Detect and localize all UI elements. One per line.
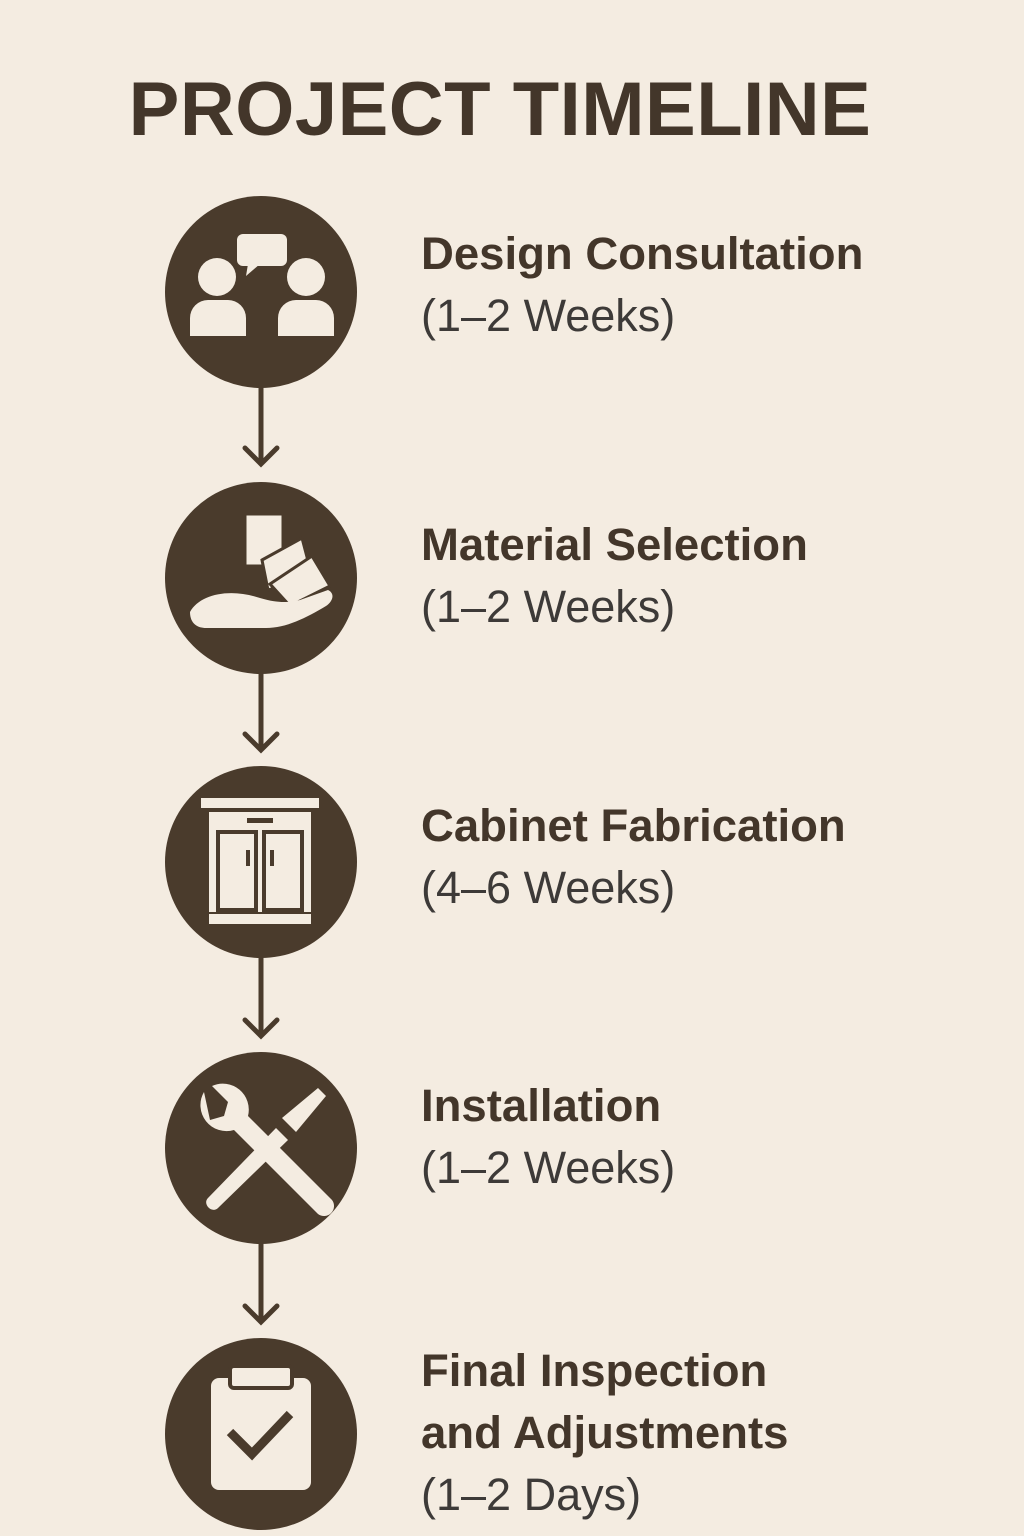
step 4 text: Installation <box>421 1080 661 1131</box>
icon: tools <box>165 1052 357 1244</box>
step 3 text: Cabinet Fabrication <box>421 800 846 851</box>
timeline arrows <box>245 388 277 1322</box>
step 2 text: Material Selection <box>421 519 808 570</box>
title: PROJECT TIMELINE <box>129 67 871 152</box>
icon: material selection <box>165 482 357 674</box>
step 1 text: (1–2 Weeks) <box>421 290 675 341</box>
step 4 text <box>421 1080 675 1193</box>
step 1 text <box>421 228 863 341</box>
step 3 text <box>421 800 846 913</box>
icon: consultation <box>165 196 357 388</box>
icon: cabinet <box>165 766 357 958</box>
step 2 text: (1–2 Weeks) <box>421 581 675 632</box>
step 1 text: Design Consultation <box>421 228 863 279</box>
step 3 text: (4–6 Weeks) <box>421 862 675 913</box>
step 5 text: Final Inspection <box>421 1345 767 1396</box>
step 5 text <box>421 1345 788 1520</box>
step 5 text: and Adjustments <box>421 1407 788 1458</box>
icon: clipboard <box>165 1338 357 1530</box>
step 4 text: (1–2 Weeks) <box>421 1142 675 1193</box>
step 5 text: (1–2 Days) <box>421 1469 641 1520</box>
step 2 text <box>421 519 808 632</box>
